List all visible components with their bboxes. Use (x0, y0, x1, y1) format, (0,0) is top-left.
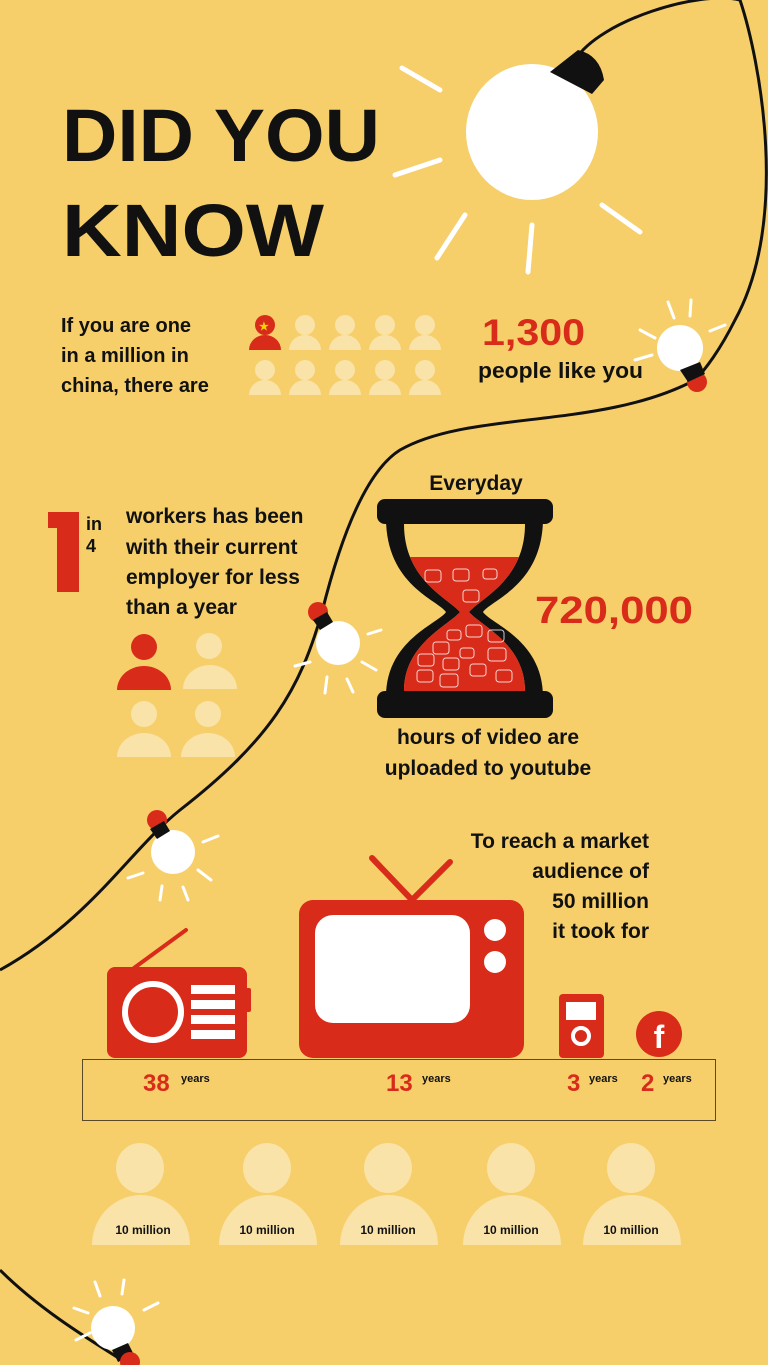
text: market audience: audience of (532, 860, 650, 883)
people icons china (249, 315, 441, 395)
icon: ipod (559, 994, 604, 1058)
timeline box (82, 1060, 716, 1120)
stat: 1 in 4: in (86, 514, 102, 534)
icon: facebook (636, 1011, 682, 1057)
timeline box: years (663, 1073, 692, 1085)
stat: 1,300 (478, 312, 643, 383)
text: market audience: 50 million (552, 890, 649, 913)
stat: 1 in 4: employer for less (126, 566, 300, 589)
text: one in a million: in a million in (61, 345, 189, 367)
title: DID YOU (62, 94, 380, 177)
text: market audience (471, 830, 650, 943)
hourglass caption (385, 726, 591, 780)
stat: 1 in 4: than a year (126, 596, 237, 619)
small bulb 4 (74, 1280, 158, 1365)
people: 10 million each: 10 million (483, 1223, 539, 1237)
title (62, 94, 380, 272)
hourglass: Everyday (429, 472, 523, 495)
stat: 1 in 4: 4 (86, 536, 96, 556)
timeline box: years (422, 1073, 451, 1085)
hourglass caption: hours of video are (397, 726, 579, 749)
stat: 1 in 4: with their current (125, 536, 298, 559)
stat: 1,300: 1,300 (482, 312, 585, 353)
icon: facebook: f (654, 1019, 665, 1055)
people icons china: ★ (259, 321, 269, 333)
small bulb 3 (128, 810, 218, 900)
text: one in a million (61, 315, 209, 397)
timeline box: years (181, 1073, 210, 1085)
people: 10 million each: 10 million (603, 1223, 659, 1237)
icon: radio (107, 930, 251, 1058)
timeline box: 13 (386, 1070, 413, 1097)
people: 10 million each (92, 1143, 681, 1245)
hourglass (377, 472, 553, 718)
icon: tv (299, 858, 524, 1058)
people icons 1 in 4 (117, 633, 237, 757)
hourglass caption: uploaded to youtube (385, 757, 591, 780)
title: KNOW (62, 189, 324, 272)
text: market audience: To reach a market (471, 830, 649, 853)
timeline box: 38 (143, 1070, 170, 1097)
stat: 1 in 4 (48, 505, 303, 619)
big light bulb (395, 50, 640, 272)
small bulb 2 (295, 602, 381, 693)
text: market audience: it took for (552, 920, 649, 943)
people: 10 million each: 10 million (239, 1223, 295, 1237)
people: 10 million each: 10 million (115, 1223, 171, 1237)
stat: 720,000: 720,000 (535, 590, 693, 632)
stat: 1 in 4: workers has been (125, 505, 303, 528)
timeline box: 3 (567, 1070, 580, 1097)
text: one in a million: If you are one (61, 315, 191, 337)
stat: 1,300: people like you (478, 358, 643, 383)
small bulb 1 (635, 300, 725, 392)
people: 10 million each: 10 million (360, 1223, 416, 1237)
timeline box: years (589, 1073, 618, 1085)
timeline box: 2 (641, 1070, 654, 1097)
text: one in a million: china, there are (61, 375, 209, 397)
